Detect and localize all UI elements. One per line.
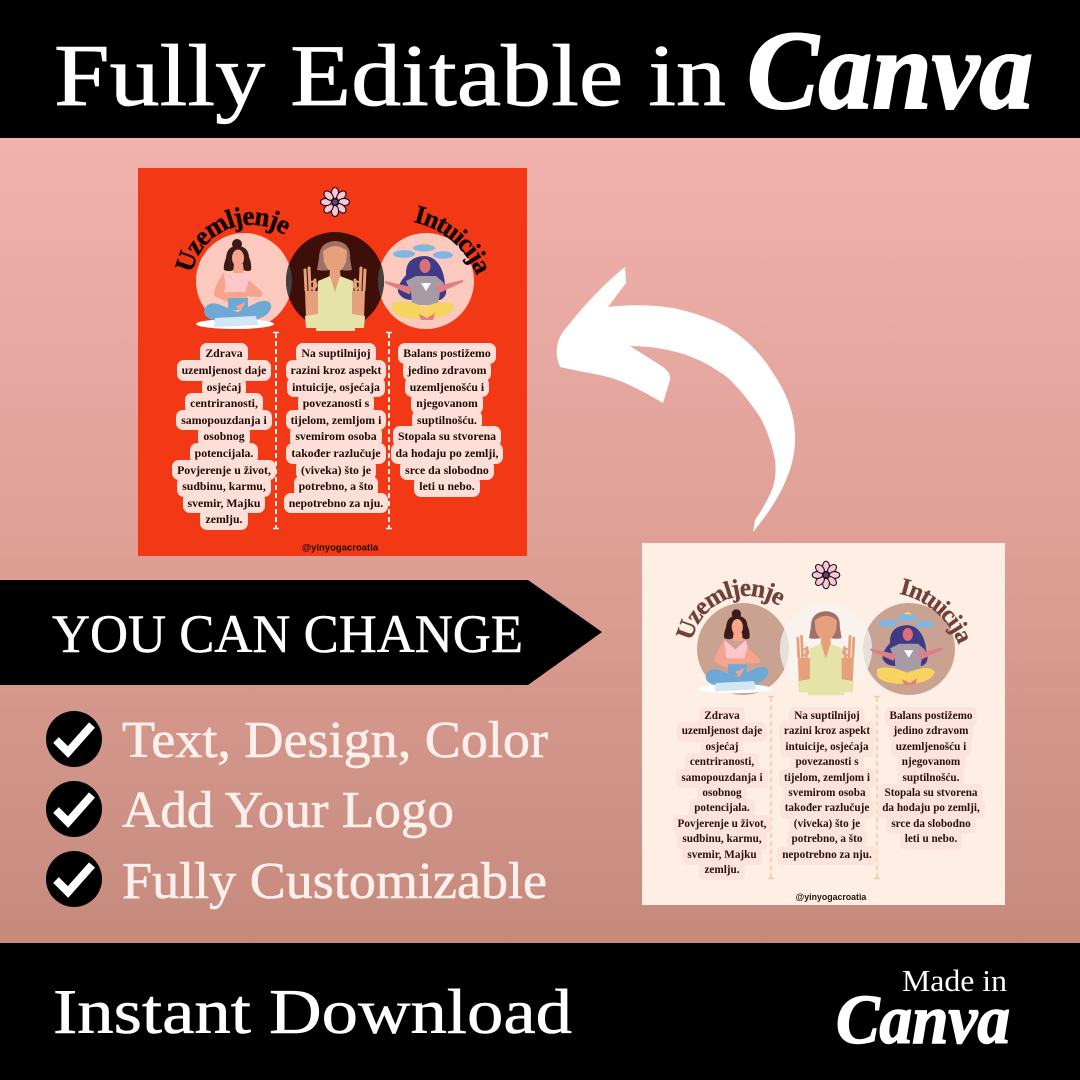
text block: cream card column 1: svemir, Majku: [687, 849, 757, 861]
text block: cream card column 3: da hodaju po zemlji,: [882, 802, 980, 814]
text block: cream card column 1: osobnog: [702, 787, 742, 799]
text block: red card column 1: osobnog: [203, 429, 245, 443]
text block: red card column 3: njegovanom: [416, 396, 478, 410]
handle cream card: @yinyogacroatia: [796, 892, 866, 902]
text block: cream card column 2: povezanosti s: [795, 756, 859, 768]
text block: red card column 1: Zdrava: [205, 346, 243, 360]
figure: central woman: [305, 241, 365, 331]
checklist: [46, 711, 548, 910]
text block: red card column 2: [284, 343, 388, 513]
text block: cream card column 1: osjećaj: [706, 741, 738, 753]
text block: cream card column 2: tijelom, zemljom i: [784, 772, 870, 784]
text block: red card column 2: također razlučuje: [291, 446, 381, 460]
text block: red card column 1: osjećaj: [207, 380, 241, 394]
panel: red template card: [138, 168, 527, 556]
text block: cream card column 1: [673, 707, 771, 880]
title: Intuicija: Intuicija: [414, 205, 486, 276]
text block: red card column 1: potencijala.: [195, 446, 253, 460]
text block: red card column 3: suptilnošću.: [417, 413, 477, 427]
text block: red card column 3: uzemljenošću i: [410, 380, 484, 394]
text block: cream card column 1: samopouzdanja i: [681, 772, 763, 784]
text block: cream card column 2: (viveka) što je: [794, 818, 860, 830]
text block: red card column 2: (viveka) što je: [301, 463, 371, 477]
icon: mandala red card: [320, 188, 350, 216]
text block: red card column 1: Povjerenje u život,: [177, 463, 271, 477]
title: Uzemljenje cream: Uzemljenje: [676, 579, 784, 638]
text block: red card column 2: intuicije, osjećaja: [292, 380, 380, 394]
text block: red card column 1: svemir, Majku: [188, 496, 260, 510]
dashed divider right: [386, 332, 392, 528]
panel: cream template card: [642, 543, 1005, 905]
text block: cream card column 3: [877, 707, 985, 850]
handle red card: @yinyogacroatia: [302, 542, 379, 554]
text block: red card column 2: tijelom, zemljom i: [291, 413, 381, 427]
text block: cream card column 3: suptilnošću.: [903, 772, 959, 784]
text block: red card column 2: svemirom osoba: [295, 429, 377, 443]
text block: red card column 3: da hodaju po zemlji,: [396, 446, 498, 460]
item: Add Your Logo: Add Your Logo: [122, 782, 454, 839]
text block: cream card column 2: razini kroz aspekt: [784, 725, 870, 737]
text block: red card column 1: sudbinu, karmu,: [182, 479, 266, 493]
text block: cream card column 1: Povjerenje u život,: [678, 818, 766, 830]
text block: red card column 2: nepotrebno za nju.: [289, 496, 383, 510]
text block: red card column 3: leti u nebo.: [419, 479, 475, 493]
text block: cream card column 1: centriranosti,: [690, 756, 754, 768]
text block: cream card column 2: nepotrebno za nju.: [782, 849, 872, 861]
heading: Fully Editable in: Fully Editable in: [54, 28, 726, 125]
dashed divider cream right: [874, 696, 880, 878]
text block: cream card column 3: leti u nebo.: [905, 833, 957, 845]
text block: red card column 1: zemlju.: [205, 512, 242, 526]
circles cream card: [697, 603, 955, 695]
text block: cream card column 2: [777, 707, 877, 865]
title: Uzemljenje: Uzemljenje: [174, 207, 289, 270]
text block: red card column 2: potrebno, a što: [299, 479, 373, 493]
dashed divider cream left: [768, 696, 774, 878]
text block: cream card column 3: njegovanom: [902, 756, 960, 768]
figure: intuition woman cream: [870, 612, 943, 685]
text block: cream card column 2: svemirom osoba: [788, 787, 866, 799]
arrow: [557, 267, 795, 532]
text block: cream card column 3: uzemljenošću i: [896, 741, 966, 753]
item: Text, Design, Color: Text, Design, Color: [122, 712, 548, 769]
text block: red card column 3: srce da slobodno: [405, 463, 489, 477]
text block: cream card column 3: srce da slobodno: [891, 818, 971, 830]
text: Instant Download: Instant Download: [53, 976, 572, 1047]
text block: cream card column 2: također razlučuje: [785, 802, 869, 814]
text block: cream card column 2: potrebno, a što: [792, 833, 862, 845]
text block: red card column 1: [172, 343, 276, 530]
bottom banner: [0, 943, 1080, 1080]
ribbon: YOU CAN CHANGE: [0, 580, 602, 685]
text block: red card column 2: Na suptilnijoj: [301, 346, 371, 360]
text block: cream card column 2: Na suptilnijoj: [794, 710, 860, 722]
text block: cream card column 1: Zdrava: [704, 710, 740, 722]
text block: red card column 3: Balans postižemo: [403, 346, 491, 360]
circles red card: [196, 232, 474, 330]
ribbon: YOU CAN CHANGE: YOU CAN CHANGE: [52, 604, 523, 664]
text block: red card column 2: povezanosti s: [303, 396, 369, 410]
text block: red card column 1: samopouzdanja i: [181, 413, 267, 427]
figure: grounded woman: [196, 239, 274, 329]
figure: central woman cream: [798, 611, 854, 695]
figure: intuition woman: [385, 242, 463, 320]
logo: Canva small: Canva: [836, 982, 1010, 1059]
logo: Canva: Canva: [747, 9, 1033, 133]
text block: cream card column 3: Stopala su stvorena: [884, 787, 978, 799]
text block: cream card column 2: intuicije, osjećaja: [785, 741, 869, 753]
text block: red card column 3: Stopala su stvorena: [398, 429, 496, 443]
text block: cream card column 1: uzemljenost daje: [682, 725, 762, 737]
dashed divider left: [273, 332, 279, 528]
figure: grounded woman cream: [698, 609, 771, 693]
title: Intuicija cream: Intuicija: [900, 578, 968, 645]
text: Made in: Made in: [902, 963, 1008, 998]
text block: cream card column 1: zemlju.: [704, 864, 740, 876]
top banner: [0, 0, 1080, 138]
icon: mandala cream card: [812, 561, 840, 589]
text block: cream card column 1: sudbinu, karmu,: [682, 833, 762, 845]
item: Fully Customizable: Fully Customizable: [122, 853, 547, 910]
text block: red card column 1: uzemljenost daje: [182, 363, 266, 377]
text block: red card column 2: razini kroz aspekt: [291, 363, 381, 377]
text block: red card column 3: jedino zdravom: [408, 363, 486, 377]
text block: cream card column 3: jedino zdravom: [894, 725, 968, 737]
text block: cream card column 1: potencijala.: [694, 802, 750, 814]
text block: red card column 1: centriranosti,: [190, 396, 258, 410]
text block: cream card column 3: Balans postižemo: [890, 710, 972, 722]
text block: red card column 3: [391, 343, 503, 497]
